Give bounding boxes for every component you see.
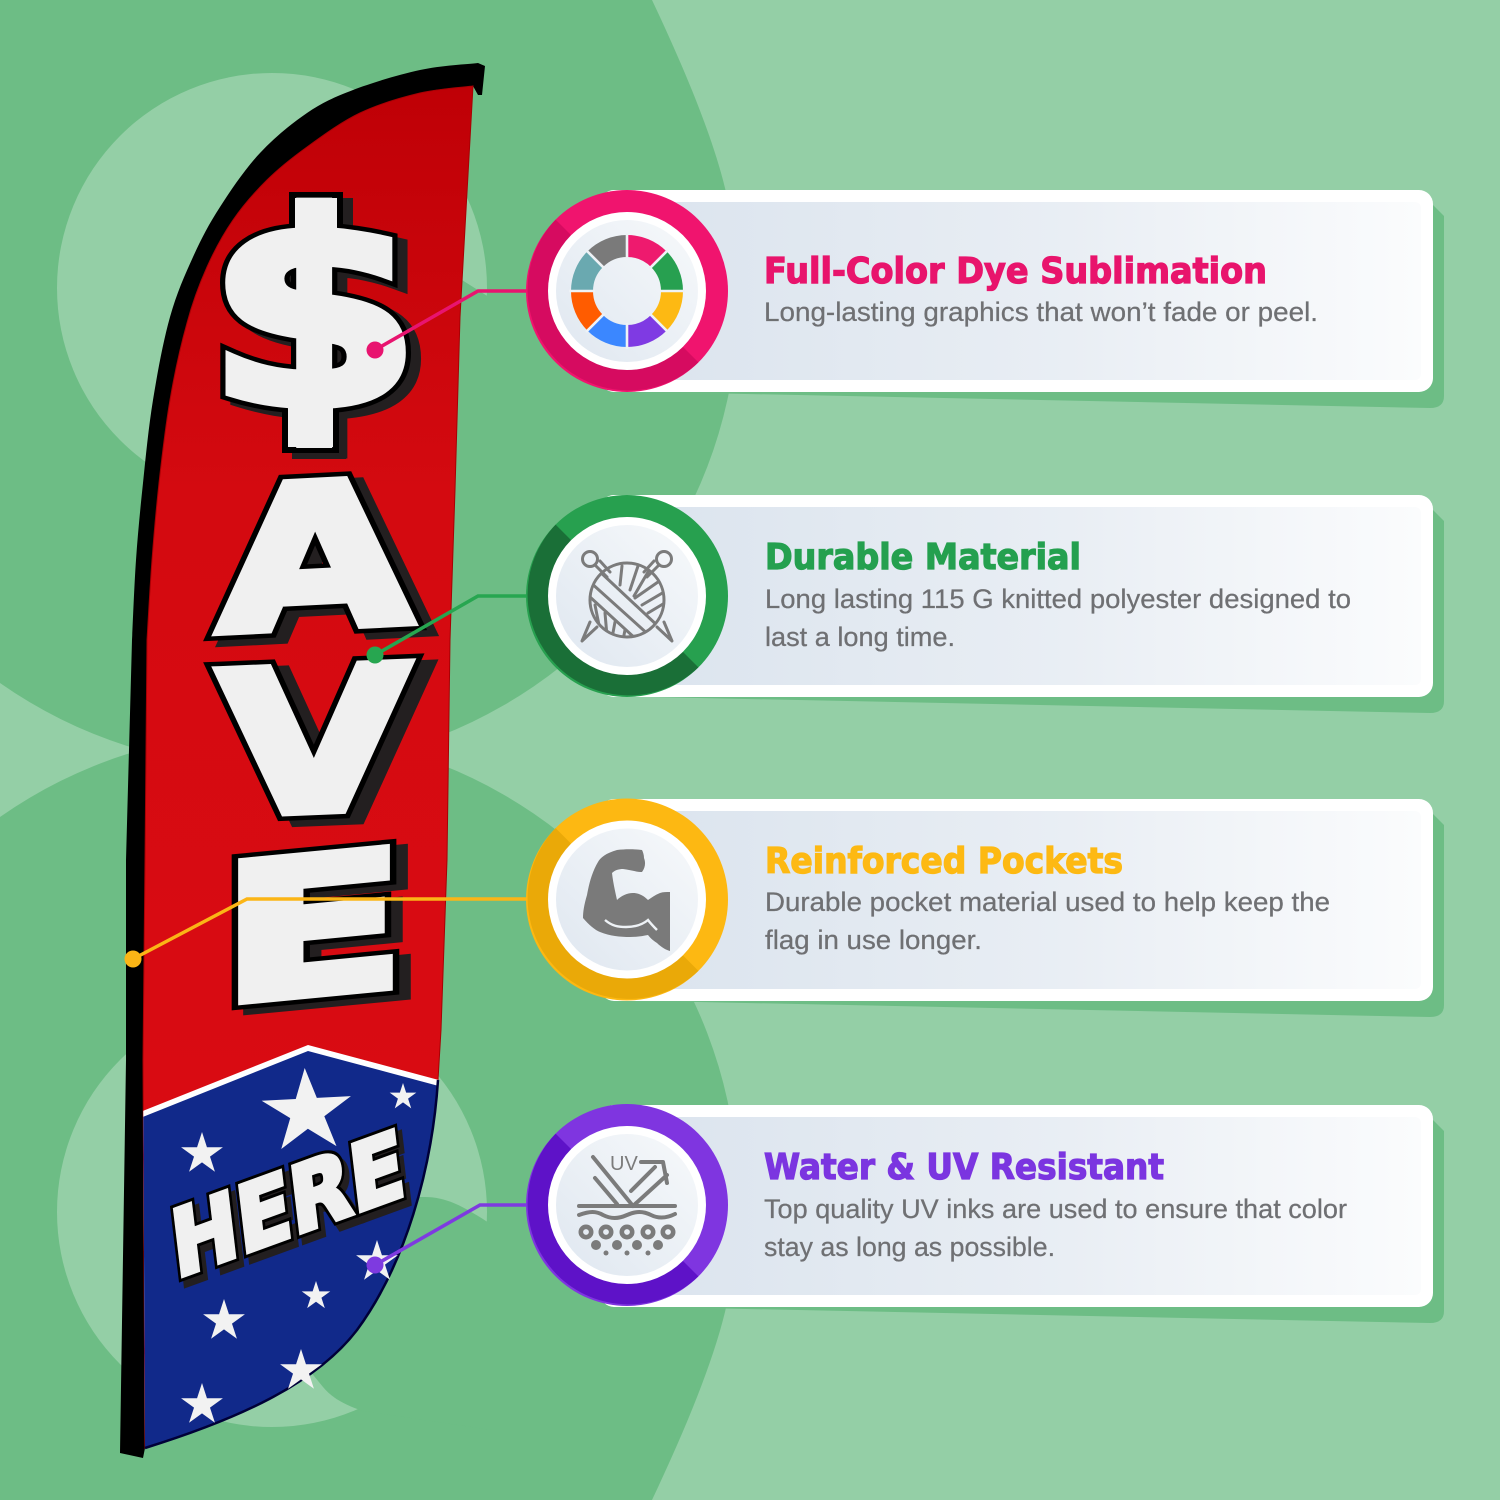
card	[600, 495, 1433, 697]
icon: uv reflecting skin layers	[579, 1153, 675, 1256]
flag lower edge	[145, 1080, 438, 1448]
flag letter: dollar sign: $	[207, 158, 421, 467]
flag word: HERE: HERE	[171, 1117, 415, 1306]
icon badge: yarn ball	[526, 495, 728, 697]
heading: Durable Material	[765, 537, 1081, 578]
card	[600, 1105, 1433, 1307]
panel: water and uv resistant	[600, 1105, 1444, 1323]
flag red body	[143, 86, 473, 1448]
flag blue band	[143, 1045, 438, 1447]
flag word: HERE: HERE	[166, 1111, 410, 1300]
description	[764, 1194, 1347, 1262]
panel: full-color dye sublimation	[600, 190, 1444, 408]
flag letter: dollar sign: $	[207, 158, 421, 467]
description: Long lasting 115 G knitted polyester designed to	[765, 584, 1351, 614]
icon: uv reflecting skin layers: UV	[610, 1153, 638, 1175]
flag letter: V: V	[219, 625, 409, 861]
card shadow	[650, 510, 1444, 713]
flag letter: V: V	[233, 631, 423, 867]
card shadow	[650, 1120, 1444, 1323]
description: Top quality UV inks are used to ensure that color	[764, 1194, 1347, 1224]
description	[765, 584, 1351, 652]
card	[600, 190, 1433, 392]
description: Durable pocket material used to help keep the	[765, 887, 1330, 917]
description	[765, 887, 1330, 955]
flag word: HERE: HERE	[166, 1111, 410, 1300]
flag letter: E: E	[220, 811, 405, 1047]
card inner	[640, 811, 1421, 989]
card inner	[640, 202, 1421, 380]
flag letter: dollar sign: $	[217, 164, 431, 473]
connector: green	[366, 596, 530, 664]
flag pole sleeve	[120, 63, 485, 1458]
panel: durable material	[600, 495, 1444, 713]
flag letter: E: E	[232, 816, 417, 1052]
icon badge: uv resistance	[526, 1104, 728, 1306]
connector: purple	[366, 1205, 530, 1274]
connector: yellow	[124, 899, 530, 968]
description: last a long time.	[765, 622, 955, 652]
card shadow	[650, 205, 1444, 408]
icon: flexed arm	[583, 849, 670, 951]
flag letter: A: A	[231, 445, 423, 684]
icon: color wheel segments	[569, 233, 685, 349]
description: flag in use longer.	[765, 925, 982, 955]
card shadow	[650, 814, 1444, 1017]
icon badge: muscle arm	[526, 798, 728, 1000]
heading: Full-Color Dye Sublimation	[764, 251, 1267, 292]
flag letter: E: E	[220, 811, 405, 1047]
feather flag	[120, 63, 485, 1470]
flag letter: A: A	[219, 439, 411, 678]
heading: Reinforced Pockets	[765, 841, 1123, 882]
flag letter: A: A	[219, 439, 411, 678]
connector: pink	[366, 291, 530, 358]
card inner	[640, 507, 1421, 685]
card	[600, 799, 1433, 1001]
heading: Water & UV Resistant	[764, 1147, 1164, 1188]
stars	[181, 1066, 416, 1423]
card inner	[640, 1117, 1421, 1295]
description: stay as long as possible.	[764, 1232, 1055, 1262]
icon badge: color wheel	[526, 190, 728, 392]
icon: yarn and needles	[582, 552, 672, 641]
flag letter: V: V	[219, 625, 409, 861]
panel: reinforced pockets	[600, 799, 1444, 1017]
description: Long-lasting graphics that won’t fade or peel.	[764, 297, 1318, 327]
